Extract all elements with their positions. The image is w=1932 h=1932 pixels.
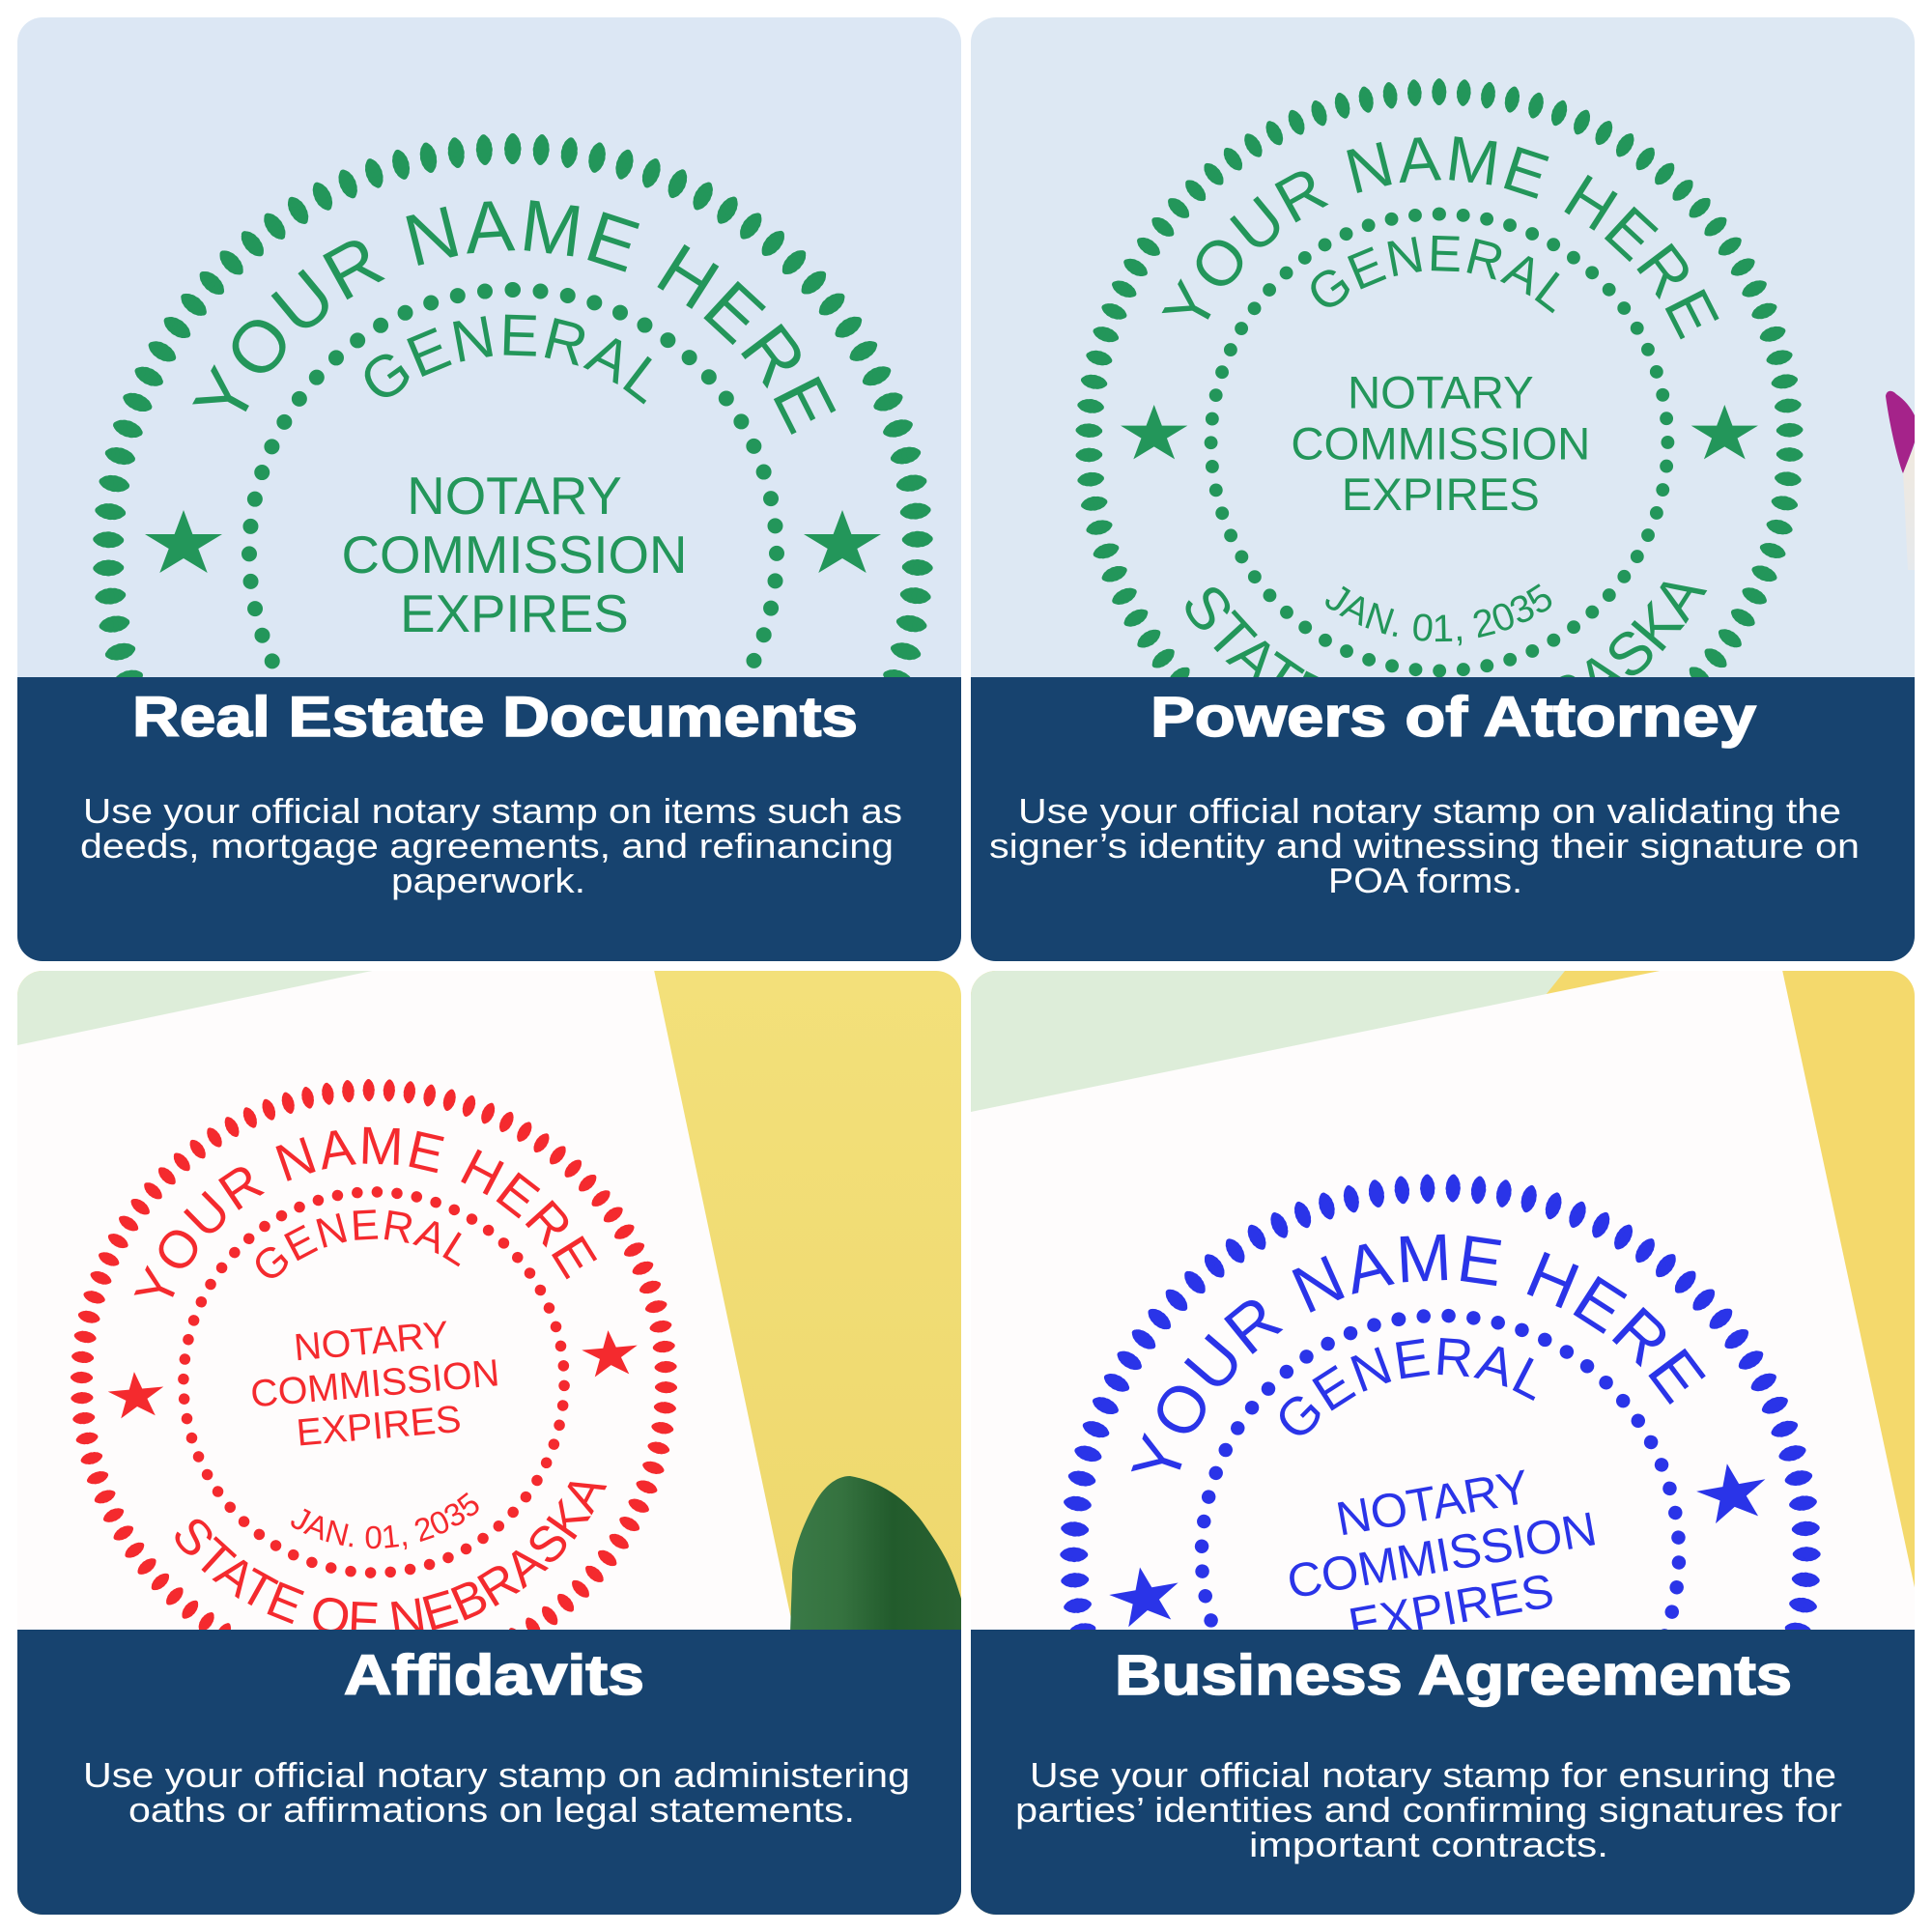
caption panel (17, 677, 961, 961)
green notary stamp: NOTARY (407, 467, 622, 526)
green notary stamp: STATE OF NEBRASKA (1186, 582, 1708, 677)
green notary stamp: GENERAL (365, 315, 652, 404)
blue notary stamp: YOUR NAME HERE (1130, 1235, 1706, 1472)
description (990, 798, 1857, 893)
description: paperwork. (391, 861, 585, 900)
caption panel (971, 1630, 1915, 1915)
caption panel (17, 1630, 961, 1915)
green notary stamp (1076, 78, 1803, 677)
blue notary stamp: NOTARY (1332, 1460, 1533, 1547)
red notary stamp: GENERAL (256, 1209, 462, 1278)
blue notary stamp (1060, 1175, 1821, 1630)
flower petal (1886, 391, 1915, 473)
green notary stamp: EXPIRES (400, 584, 629, 643)
green notary stamp: NOTARY (1348, 367, 1534, 418)
description (86, 1762, 908, 1830)
pale green sheet (17, 971, 372, 1045)
red notary stamp: COMMISSION (249, 1351, 501, 1416)
description: Use your official notary stamp for ensuring the (1030, 1755, 1836, 1795)
blue notary stamp: STATE OF NEBRASKA (1184, 1624, 1788, 1932)
red notary stamp: STATE OF NEBRASKA (176, 1482, 607, 1630)
description: Use your official notary stamp on administering (83, 1755, 910, 1795)
description: oaths or affirmations on legal statements. (128, 1790, 855, 1830)
heading: Affidavits (344, 1644, 644, 1707)
white paper sheet (17, 970, 794, 1633)
heading: Business Agreements (1115, 1644, 1792, 1707)
description: POA forms. (1328, 861, 1522, 900)
blue notary stamp: GENERAL (1280, 1338, 1536, 1435)
red notary stamp (71, 1079, 677, 1630)
description: parties’ identities and confirming signatures for (1015, 1790, 1842, 1830)
red notary stamp: YOUR NAME HERE (133, 1126, 597, 1297)
description (1015, 1755, 1842, 1864)
green leaf (790, 1476, 961, 1633)
blue notary stamp: JAN. 01, 2035 (1339, 1668, 1603, 1790)
description: deeds, mortgage agreements, and refinancing (80, 826, 894, 866)
blue notary stamp: COMMISSION (1283, 1502, 1601, 1609)
panel: Business Agreements (971, 971, 1915, 1915)
green notary stamp: YOUR NAME HERE (192, 200, 837, 435)
blue notary stamp: EXPIRES (1345, 1564, 1557, 1652)
description: Use your official notary stamp on validating the (1018, 791, 1841, 831)
photo background: yellow surface (971, 971, 1915, 1915)
panel: Real Estate Documents (17, 17, 961, 961)
red notary stamp: JAN. 01, 2035 (291, 1492, 479, 1549)
green notary stamp: EXPIRES (1342, 469, 1540, 521)
caption panel (971, 677, 1915, 961)
flower stem (1903, 446, 1915, 570)
green notary stamp: COMMISSION (342, 526, 687, 584)
green notary stamp: GENERAL (1311, 236, 1560, 313)
green notary stamp (93, 133, 933, 677)
photo background: pale blue paper (971, 17, 1915, 961)
photo background: yellow surface (17, 971, 961, 1915)
panel: Affidavits (17, 971, 961, 1915)
description (80, 791, 902, 900)
red notary stamp: NOTARY (292, 1314, 450, 1369)
description: signer’s identity and witnessing their signature on (989, 826, 1860, 866)
description: Use your official notary stamp on items such as (83, 791, 902, 831)
green notary stamp: JAN. 01, 2035 (373, 706, 653, 793)
green notary stamp: JAN. 01, 2035 (1325, 583, 1551, 645)
photo background: pale blue paper (17, 17, 961, 961)
white paper sheet (971, 970, 1924, 1633)
heading: Powers of Attorney (1151, 686, 1756, 749)
description: important contracts. (1249, 1825, 1608, 1864)
pale green sheet (971, 971, 1565, 1113)
red notary stamp: EXPIRES (295, 1398, 463, 1455)
green notary stamp: YOUR NAME HERE (1161, 136, 1719, 340)
heading: Real Estate Documents (132, 686, 858, 749)
panel: Powers of Attorney (971, 17, 1915, 961)
green notary stamp: STATE OF NEBRASKA (199, 689, 840, 930)
green notary stamp: COMMISSION (1291, 418, 1590, 469)
